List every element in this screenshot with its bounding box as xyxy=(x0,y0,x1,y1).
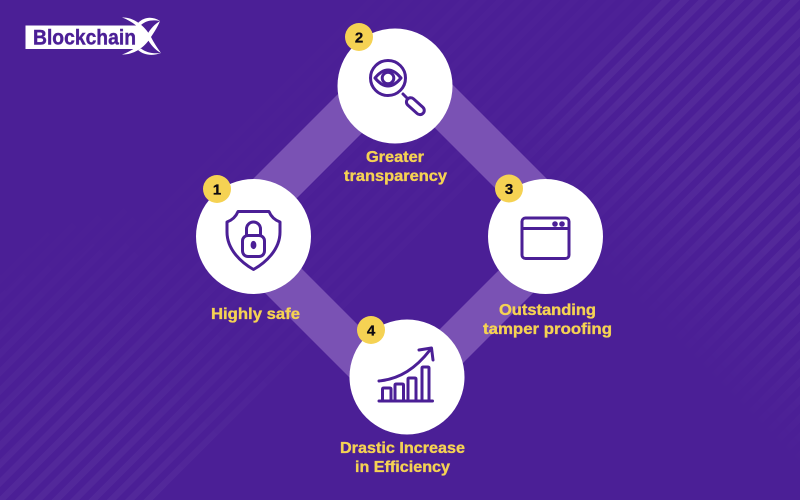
label: drastic increase in efficiency xyxy=(340,440,465,476)
step 3: outstanding tamper proofing xyxy=(483,174,612,338)
label: drastic increase in efficiency: Drastic Increase xyxy=(340,440,465,457)
badge 1: 1 xyxy=(213,182,221,198)
label: outstanding tamper proofing: tamper proofing xyxy=(483,321,612,338)
label: greater transparency: transparency xyxy=(344,168,447,185)
badge 3 xyxy=(495,174,523,202)
badge 4: 4 xyxy=(367,322,376,340)
background stripes lower left xyxy=(0,408,167,500)
label: drastic increase in efficiency: in Efficiency xyxy=(355,459,450,476)
step 1: highly safe xyxy=(196,175,311,323)
label: highly safe: Highly safe xyxy=(211,306,300,323)
badge 1 xyxy=(203,175,231,203)
icon: rising bar chart with arrow xyxy=(379,348,433,401)
label: outstanding tamper proofing xyxy=(483,302,612,338)
logo wordmark: Blockchain xyxy=(33,26,136,50)
label: greater transparency xyxy=(344,149,447,185)
label: greater transparency: Greater xyxy=(366,149,424,166)
diamond connector bands xyxy=(224,56,575,406)
logo xyxy=(26,17,161,55)
label: outstanding tamper proofing: Outstanding xyxy=(499,302,596,319)
badge 2: 2 xyxy=(355,30,363,46)
step 2: greater transparency xyxy=(338,23,452,185)
icon: eye in magnifying glass xyxy=(370,60,426,116)
background stripes upper right xyxy=(576,0,800,309)
badge 3: 3 xyxy=(505,181,513,198)
step 4: drastic increase in efficiency xyxy=(340,316,465,476)
icon: browser window xyxy=(522,218,569,258)
badge 4 xyxy=(357,316,385,344)
icon: shield with padlock xyxy=(227,212,280,270)
badge 2 xyxy=(345,23,373,51)
